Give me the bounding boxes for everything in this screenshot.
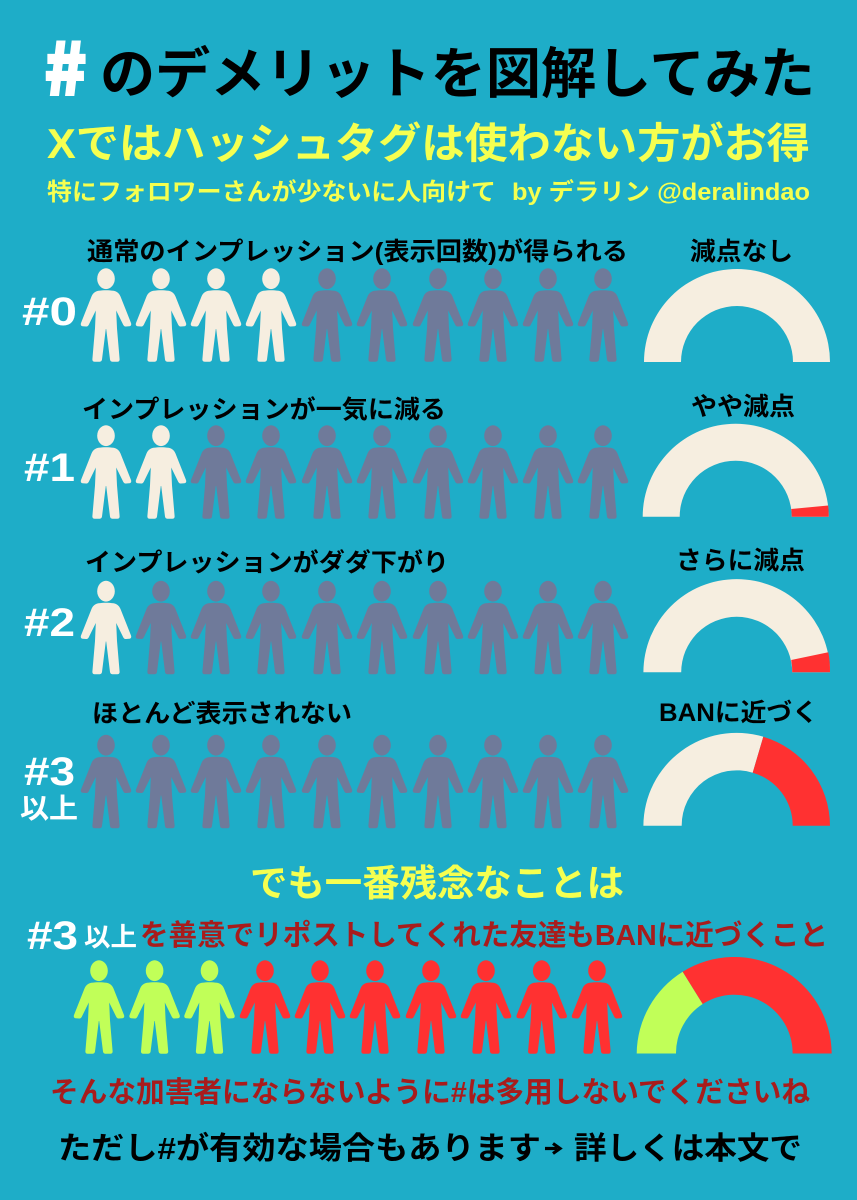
byline: by デラリン @deralindao: [512, 178, 810, 206]
heading: #3 and above: 以上: [20, 793, 78, 824]
gauge: nearing ban: [643, 733, 830, 826]
arrow: [545, 1144, 560, 1154]
heading: #0: #0: [22, 290, 77, 334]
title: のデメリットを図解してみた: [100, 43, 815, 105]
people: friends: [74, 960, 622, 1054]
panel: #2 row: [24, 547, 830, 674]
panel: #1 row: [24, 393, 829, 519]
people: 4 of 10: [81, 268, 628, 362]
gauge: friends: [637, 957, 832, 1054]
byline: [47, 178, 810, 206]
text: friends nearing ban: 以上: [84, 922, 137, 952]
people: 0 of 10: [81, 735, 628, 828]
byline: 特にフォロワーさんが少ないに人向けて: [47, 178, 496, 206]
people: 1 of 10: [81, 581, 628, 674]
text: no penalty: 減点なし: [690, 238, 793, 266]
heading: #3 and above: #3: [24, 750, 75, 794]
text: further penalty: さらに減点: [676, 547, 805, 575]
text: nearing ban: BANに近づく: [659, 699, 818, 727]
heading: #3 and above: [20, 750, 78, 824]
text: see main post: [58, 1131, 802, 1166]
title: #: [44, 11, 87, 116]
text: friends nearing ban: を善意でリポストしてくれた友達もBANに近づくこと: [140, 919, 828, 952]
subtitle: Xではハッシュタグは使わない方がお得: [47, 120, 810, 167]
heading: #1: #1: [24, 446, 75, 490]
heading: #2: #2: [24, 601, 75, 645]
text: friends nearing ban: [27, 914, 828, 958]
text: see main post: 詳しくは本文で: [574, 1131, 802, 1166]
text: slight penalty: やや減点: [691, 393, 795, 421]
text: please do not overuse: そんな加害者にならないように#は多用しないでくださいね: [50, 1076, 810, 1109]
text: friends nearing ban: #3: [27, 914, 78, 958]
gauge: slight penalty: [643, 424, 829, 517]
people: 2 of 10: [81, 425, 628, 519]
title: [44, 11, 815, 116]
text: steep decline: インプレッションがダダ下がり: [85, 548, 449, 577]
text: impressions drop: インプレッションが一気に減る: [82, 395, 446, 424]
gauge: further penalty: [643, 579, 830, 672]
text: normal impressions: 通常のインプレッション(表示回数)が得られる: [87, 237, 628, 266]
gauge: no penalty: [644, 269, 830, 362]
panel: #0 row: [22, 237, 830, 362]
heading: the most unfortunate thing: でも一番残念なことは: [250, 863, 624, 904]
text: barely displayed: ほとんど表示されない: [92, 700, 352, 728]
text: see main post: ただし#が有効な場合もあります: [58, 1131, 541, 1166]
panel: #3+ row: [20, 699, 830, 828]
